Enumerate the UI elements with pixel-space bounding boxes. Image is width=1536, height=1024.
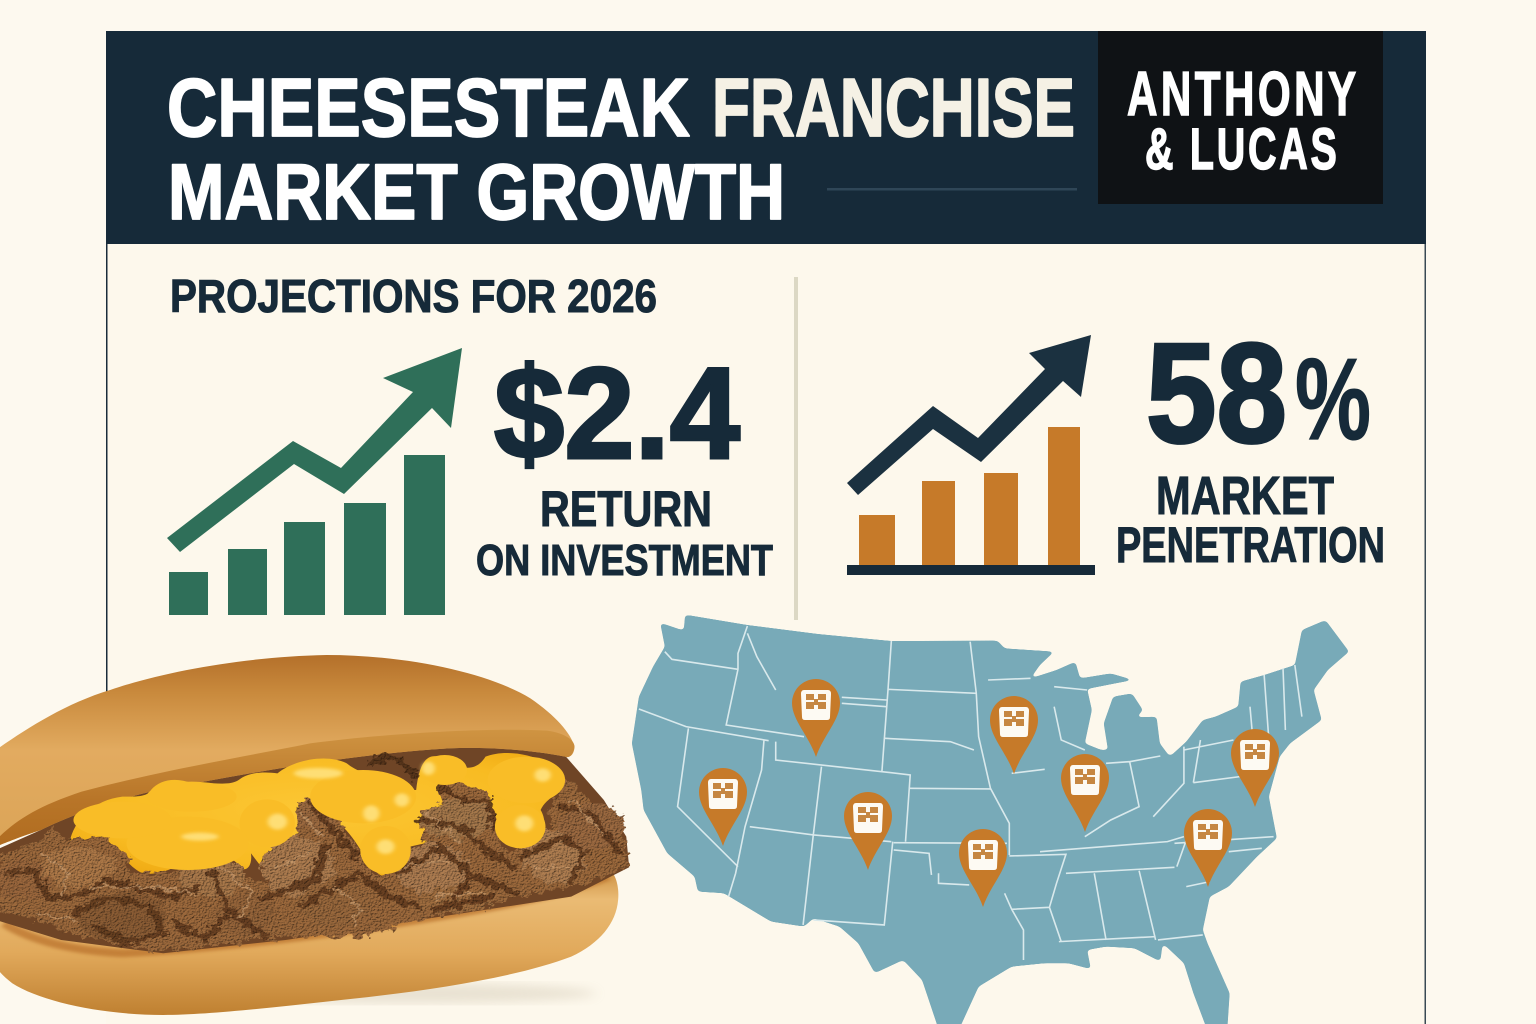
pin: New Jersey — [1231, 729, 1279, 807]
top bun — [0, 655, 574, 847]
cheese highlights — [181, 762, 551, 854]
arrow: green growth — [167, 348, 462, 552]
pin: Oklahoma — [959, 829, 1007, 907]
section heading: PROJECTIONS FOR 2026 — [170, 270, 657, 322]
bottom bun — [0, 867, 618, 1015]
header band — [106, 31, 1426, 244]
label: market penetration: MARKET — [1156, 466, 1334, 526]
vertical divider — [794, 277, 798, 620]
pin: Illinois — [1061, 754, 1109, 832]
title: MARKET GROWTH — [168, 147, 785, 236]
bar chart: market penetration — [847, 335, 1095, 575]
shredded steak — [0, 757, 628, 952]
pin: Nevada — [699, 768, 747, 846]
logo box: ANTHONY — [1127, 60, 1356, 129]
title — [167, 61, 1075, 236]
pin: Iowa — [990, 696, 1038, 774]
map: United States — [632, 615, 1349, 1024]
label: return on investment: ON INVESTMENT — [476, 536, 773, 585]
meat base — [0, 740, 629, 953]
stat: 58 percent: % — [1295, 334, 1371, 464]
label: market penetration — [1116, 466, 1385, 573]
panel frame — [106, 240, 1426, 1024]
logo box: & LUCAS — [1145, 116, 1337, 182]
stat: 58 percent: 58 — [1146, 314, 1287, 473]
shadow — [220, 983, 596, 1003]
melted cheese — [69, 753, 565, 877]
title: FRANCHISE — [712, 61, 1075, 154]
pin: Wyoming — [792, 679, 840, 757]
title: CHEESESTEAK — [167, 61, 690, 154]
label: return on investment — [476, 481, 773, 585]
pin: North Carolina — [1184, 809, 1232, 887]
cheesesteak sandwich — [0, 655, 629, 1015]
arrow: navy growth — [847, 335, 1091, 495]
pin: Colorado — [844, 792, 892, 870]
logo box — [1098, 31, 1383, 204]
label: return on investment: RETURN — [540, 481, 712, 537]
US map with pins — [632, 615, 1349, 1024]
steak folds — [0, 797, 624, 942]
label: market penetration: PENETRATION — [1116, 517, 1385, 573]
bar chart: return on investment — [167, 348, 462, 615]
cheese drips — [73, 755, 565, 874]
stat: 2.4 dollars: $2.4 — [494, 340, 740, 486]
